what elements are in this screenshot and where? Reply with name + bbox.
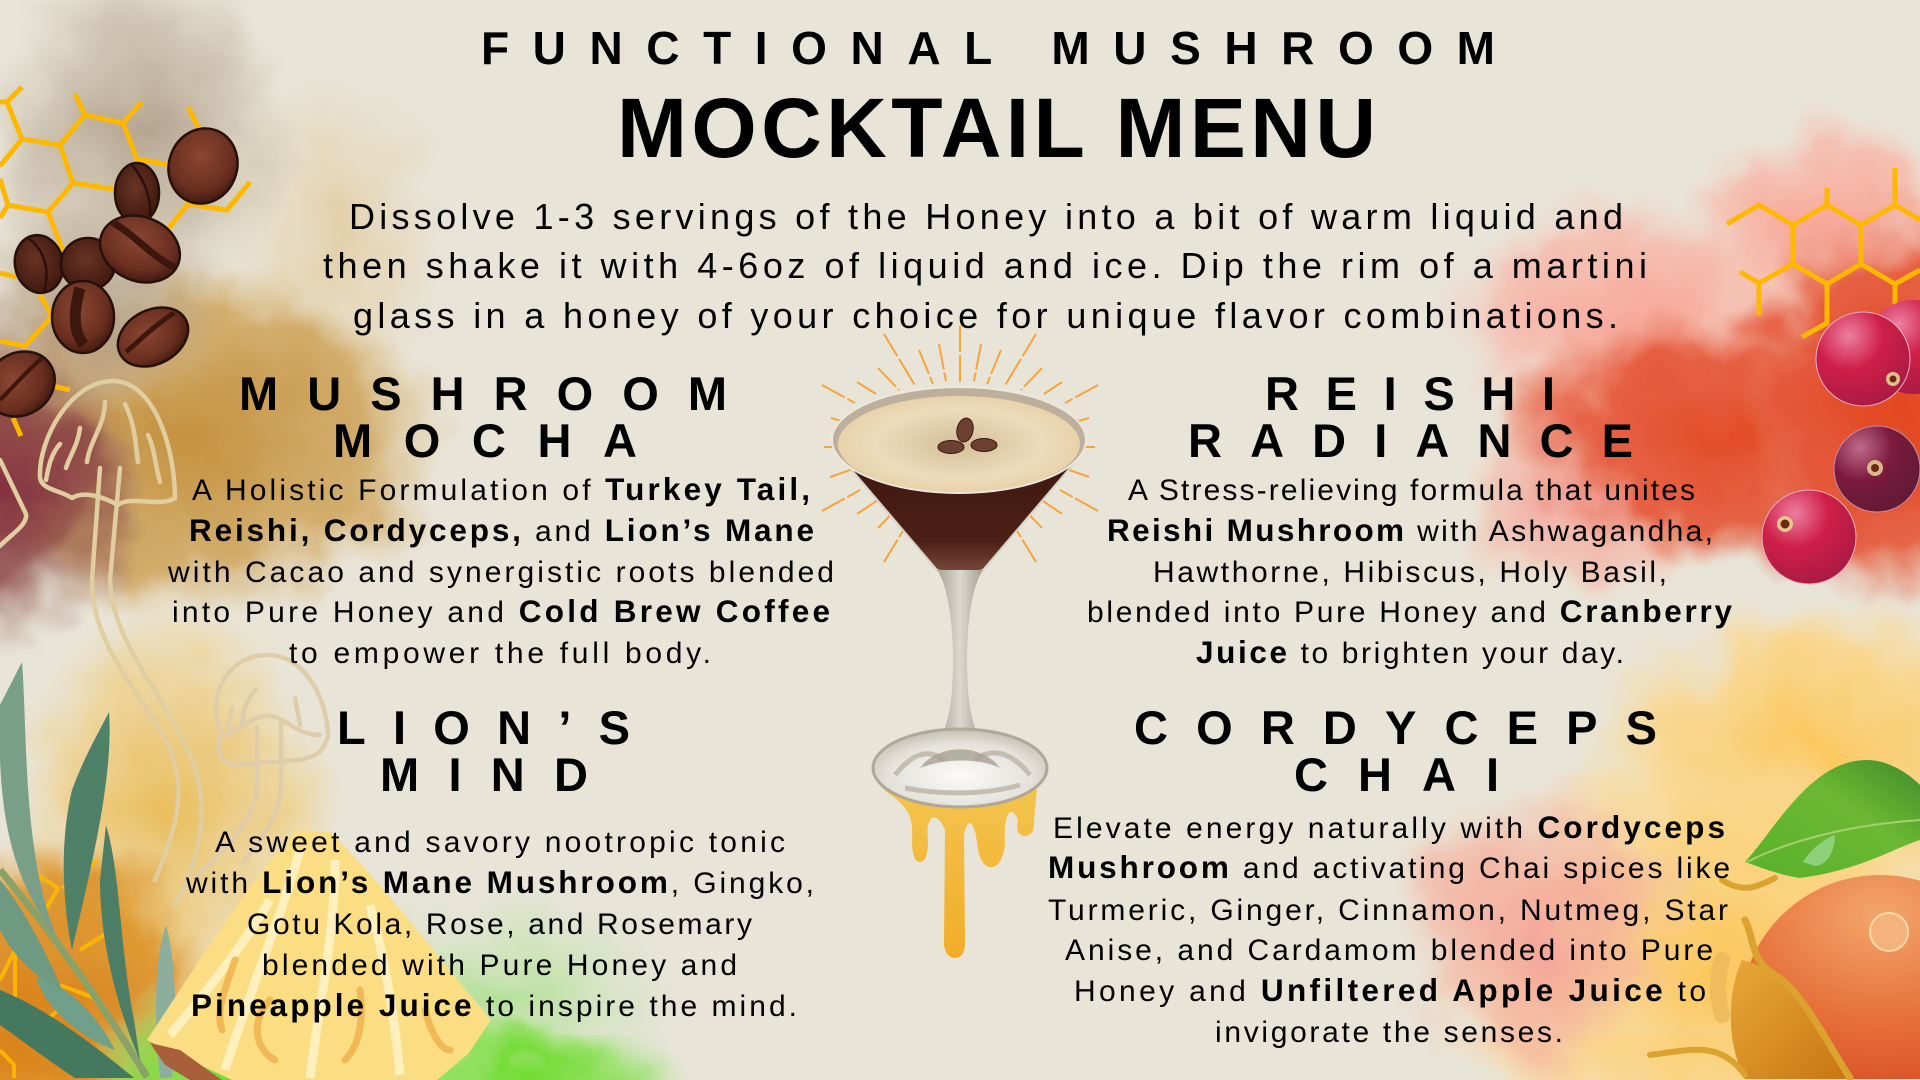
bean <box>52 281 114 353</box>
coffee beans <box>0 119 248 429</box>
cranberry <box>1866 300 1920 394</box>
foot <box>873 729 1047 807</box>
panel: cordyceps chai <box>1048 701 1730 1049</box>
body: Mushroom and activating Chai spices like <box>1048 849 1730 885</box>
mushroom outlines <box>0 381 328 905</box>
intro text: glass in a honey of your choice for unique flavor combinations. <box>353 295 1618 336</box>
body <box>185 826 814 1023</box>
cranberries <box>1762 300 1920 584</box>
bean <box>108 296 198 378</box>
body: blended with Pure Honey and <box>262 949 737 982</box>
apple <box>1740 875 1920 1079</box>
body: Reishi Mushroom with Ashwagandha, <box>1107 512 1713 548</box>
bowl <box>845 462 1075 574</box>
body: A sweet and savory nootropic tonic <box>215 826 785 859</box>
bean <box>61 238 115 290</box>
heading: CORDYCEPS <box>1134 701 1657 754</box>
body <box>1087 474 1732 670</box>
cranberry <box>1834 426 1920 512</box>
heading <box>239 367 727 467</box>
title line 2: MOCKTAIL MENU <box>617 81 1376 175</box>
large mushroom <box>40 381 202 905</box>
rim <box>832 387 1086 493</box>
leaf <box>36 977 115 1050</box>
panel: reishi radiance <box>1087 367 1732 670</box>
body: A Stress-relieving formula that unites <box>1128 474 1695 507</box>
body: invigorate the senses. <box>1215 1016 1563 1049</box>
juice wave <box>1731 960 1848 1079</box>
cranberry <box>1762 490 1856 584</box>
body: with Cacao and synergistic roots blended <box>167 556 834 589</box>
bean <box>115 163 159 223</box>
body: into Pure Honey and Cold Brew Coffee <box>172 593 830 629</box>
panel: mushroom mocha <box>167 367 834 670</box>
body: Hawthorne, Hibiscus, Holy Basil, <box>1153 556 1667 589</box>
headline <box>481 22 1495 175</box>
bean <box>9 231 69 297</box>
heading: REISHI <box>1265 367 1555 420</box>
body: with Lion’s Mane Mushroom, Gingko, <box>185 864 814 900</box>
sunburst rays <box>822 326 1098 562</box>
rosemary sprig <box>0 662 175 1078</box>
heading: MIND <box>380 748 588 801</box>
body <box>1048 809 1730 1049</box>
foam <box>838 396 1080 492</box>
bean <box>90 204 190 294</box>
bottom wash underlay <box>0 1035 1920 1080</box>
body: Anise, and Cardamom blended into Pure <box>1065 934 1713 967</box>
stem <box>925 570 995 762</box>
body: blended into Pure Honey and Cranberry <box>1087 593 1732 629</box>
pineapple rind <box>150 1043 222 1080</box>
apple with juice splash <box>1650 760 1920 1079</box>
intro text: then shake it with 4-6oz of liquid and ice. Dip the rim of a martini <box>323 245 1647 286</box>
body: Honey and Unfiltered Apple Juice to <box>1074 972 1706 1008</box>
bean garnish <box>938 417 997 454</box>
martini glass illustration <box>822 326 1098 958</box>
leaf <box>0 880 62 990</box>
honey drips <box>883 789 1037 958</box>
juice splash <box>1650 878 1850 1078</box>
heading <box>337 701 630 801</box>
body: Gotu Kola, Rose, and Rosemary <box>247 908 752 941</box>
honeycomb: top left <box>0 87 250 436</box>
heading: RADIANCE <box>1188 414 1633 467</box>
partial mushroom at left edge <box>0 460 26 546</box>
body: Juice to brighten your day. <box>1196 634 1624 670</box>
panel: lion's mind <box>185 701 814 1023</box>
body: A Holistic Formulation of Turkey Tail, <box>192 471 810 507</box>
body: to empower the full body. <box>289 637 711 670</box>
bean <box>158 119 248 213</box>
honeycomb: top right <box>1727 168 1920 392</box>
leaf <box>0 662 60 945</box>
apple dew drop <box>1870 913 1908 951</box>
leaf <box>156 925 175 1078</box>
body: Turmeric, Ginger, Cinnamon, Nutmeg, Star <box>1048 894 1728 927</box>
body: Pineapple Juice to inspire the mind. <box>191 987 797 1023</box>
body: Elevate energy naturally with Cordyceps <box>1053 809 1725 845</box>
bean <box>0 339 67 429</box>
heading <box>1134 701 1657 801</box>
leaf <box>0 990 134 1078</box>
body <box>167 471 834 670</box>
heading <box>1188 367 1633 467</box>
intro text: Dissolve 1-3 servings of the Honey into a bit of warm liquid and <box>349 196 1623 237</box>
leaf <box>64 712 110 950</box>
pineapple slice <box>147 830 491 1080</box>
heading: MOCHA <box>333 414 637 467</box>
heading: CHAI <box>1294 748 1499 801</box>
honeycomb: bottom left <box>0 860 120 1078</box>
leaf <box>1745 760 1920 878</box>
heading: MUSHROOM <box>239 367 727 420</box>
leaf <box>100 825 140 1060</box>
heading: LION’S <box>337 701 630 754</box>
cranberry <box>1816 312 1910 406</box>
body: Reishi, Cordyceps, and Lion’s Mane <box>189 512 814 548</box>
intro text <box>323 196 1647 336</box>
title line 1: FUNCTIONAL MUSHROOM <box>481 22 1495 74</box>
small mushroom <box>196 655 328 877</box>
